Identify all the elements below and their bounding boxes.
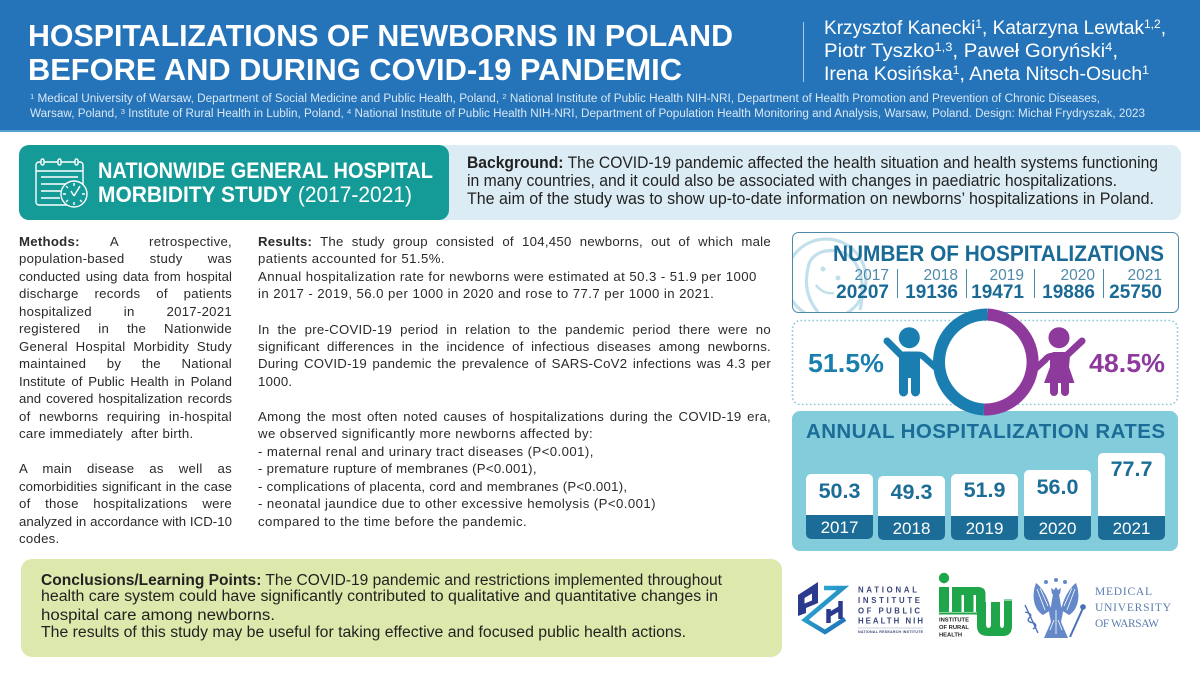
text block: results xyxy=(258,234,771,529)
text block: results: Annual hospitalization rate for newborns were estimated at 50.3 - 51.9 per 1000 xyxy=(258,269,757,284)
donut chart xyxy=(939,314,1033,410)
authors: 1 xyxy=(1142,63,1149,77)
bar 2019: 2019 xyxy=(966,519,1003,538)
years row: 2021 xyxy=(1128,267,1162,284)
text block: results: During COVID-19 pandemic the prevalence of SARS-CoV2 infections was 4.3 per xyxy=(258,356,771,371)
text block: results: significant differences in the incidence of infectious diseases among newborns. xyxy=(258,339,771,354)
bar 2020: 56.0 xyxy=(1037,475,1078,499)
panel: number of hospitalizations: NUMBER OF HOSPITALIZATIONS xyxy=(833,241,1164,266)
years row: 2017 xyxy=(855,267,889,284)
panel: study name xyxy=(19,145,449,220)
affiliations xyxy=(30,92,1145,120)
logo: institute of rural health xyxy=(939,573,1012,638)
text block: methods: analyzed in accordance with ICD-10 xyxy=(19,514,232,529)
text block: results: Results: The study group consisted of 104,450 newborns, out of which male xyxy=(258,234,771,249)
affiliations: National Institute of Public Health NIH-NRI, Department of Population Health Monitoring and Analysis, Warsaw, Poland. Design: Michał Frydryszak, 2023 xyxy=(351,108,1145,120)
text block: methods: conducted using data from hospital xyxy=(19,269,232,284)
panel: annual hospitalization rates xyxy=(792,411,1178,551)
logo: national institute of public health: NATIONAL xyxy=(858,586,917,594)
text block: methods: discharge records of patients xyxy=(19,286,232,301)
text block: methods: A main disease as well as xyxy=(19,461,232,476)
logo: national institute of public health: NATIONAL RESEARCH INSTITUTE xyxy=(858,630,924,634)
authors xyxy=(824,17,1166,85)
panel: background xyxy=(430,145,1181,220)
bar 2020: 2020 xyxy=(1039,519,1076,538)
text block: methods: codes. xyxy=(19,531,59,546)
authors: , Katarzyna Lewtak xyxy=(982,18,1144,39)
panel: background: Background: The COVID-19 pandemic affected the health situation and health systems functioning xyxy=(467,154,1158,172)
affiliations: Institute of Rural Health in Lublin, Poland, xyxy=(125,108,347,120)
authors: 1 xyxy=(975,17,982,31)
text block: results: patients accounted for 51.5%. xyxy=(258,251,445,266)
bar 2018: 2018 xyxy=(893,519,930,538)
text block: methods: population-based study was xyxy=(19,251,232,266)
panel: annual hospitalization rates: ANNUAL HOSPITALIZATION RATES xyxy=(806,420,1165,443)
years row: 2018 xyxy=(924,267,958,284)
text block: results: - premature rupture of membranes (P<0.001), xyxy=(258,461,537,476)
years row xyxy=(855,267,1162,284)
text block: results: we observed significantly more newborns affected by: xyxy=(258,426,593,441)
text block: methods xyxy=(19,234,232,546)
text block: methods: of those hospitalizations were xyxy=(19,496,232,511)
affiliations: 4 xyxy=(347,107,351,116)
text block: methods: of newborns requiring in-hospital xyxy=(19,409,232,424)
authors: Krzysztof Kanecki xyxy=(824,18,975,39)
authors: 1 xyxy=(953,63,960,77)
logo: institute of rural health: INSTITUTE xyxy=(939,618,969,624)
values row xyxy=(836,282,1162,303)
text block: methods: registered in the Nationwide xyxy=(19,321,232,336)
text block: results: - complications of placenta, cord and membranes (P<0.001), xyxy=(258,479,627,494)
panel: conclusions: The results of this study may be useful for taking effective and focused public health actions. xyxy=(41,624,686,641)
text block: methods: care immediately after birth. xyxy=(19,426,193,441)
bar 2017: 50.3 xyxy=(819,479,860,503)
bar 2021: 77.7 xyxy=(1111,457,1152,481)
values row: 19136 xyxy=(905,282,958,303)
panel: study name: NATIONWIDE GENERAL HOSPITAL xyxy=(98,158,433,183)
panel: conclusions: Conclusions/Learning Points: The COVID-19 pandemic and restrictions implemented throughout xyxy=(41,572,723,589)
authors: , xyxy=(1112,41,1118,62)
text block: methods: maintained by the National xyxy=(19,356,232,371)
text block: results: in 2017 - 2019, 56.0 per 1000 in 2020 and rose to 77.7 per 1000 in 2021. xyxy=(258,286,714,301)
bar 2019 xyxy=(951,474,1018,540)
bar 2019: 51.9 xyxy=(964,478,1005,502)
authors: 1,3 xyxy=(935,40,953,54)
icon: calendar and clock xyxy=(36,159,87,207)
text block: methods: Methods: A retrospective, xyxy=(19,234,232,249)
bar 2018: 49.3 xyxy=(891,480,932,504)
panel: conclusions xyxy=(21,559,782,657)
authors: , Aneta Nitsch-Osuch xyxy=(959,64,1142,85)
affiliations: 3 xyxy=(121,107,125,116)
text block: methods: and covered hospitalization records xyxy=(19,391,232,406)
bar 2017 xyxy=(806,474,873,539)
authors: 1,2 xyxy=(1144,17,1161,31)
bar 2017: 2017 xyxy=(821,518,858,537)
text block: results: 1000. xyxy=(258,374,292,389)
affiliations: Warsaw, Poland, xyxy=(30,108,116,120)
text block: methods: Institute of Public Health in Poland xyxy=(19,374,232,389)
affiliations: National Institute of Public Health NIH-NRI, Department of Health Promotion and Prevention of Chronic Diseases, xyxy=(507,93,1100,105)
panel: conclusions: hospital care among newborns. xyxy=(41,607,275,624)
logo: national institute of public health: HEALTH NIH xyxy=(858,616,923,626)
percent male: 51.5% xyxy=(808,348,884,378)
text block: results: compared to the time before the pandemic. xyxy=(258,514,527,529)
icon: girl xyxy=(1034,327,1082,392)
title xyxy=(28,19,733,87)
title: BEFORE AND DURING COVID-19 PANDEMIC xyxy=(28,53,682,87)
logo: national institute of public health xyxy=(798,582,924,634)
panel: header xyxy=(0,0,1200,132)
title: HOSPITALIZATIONS OF NEWBORNS IN POLAND xyxy=(28,19,733,53)
authors: , Paweł Goryński xyxy=(952,41,1105,62)
logo: institute of rural health: HEALTH xyxy=(939,632,962,638)
logo: institute of rural health: OF RURAL xyxy=(939,625,969,631)
icon: boy xyxy=(887,327,935,392)
panel: number of hospitalizations xyxy=(786,232,1178,319)
affiliations: 2 xyxy=(502,92,507,101)
authors: Piotr Tyszko xyxy=(824,41,927,62)
logo: medical university of warsaw: OF WARSAW xyxy=(1095,618,1159,630)
values row: 25750 xyxy=(1109,282,1162,303)
panel: background: The aim of the study was to show up-to-date information on newborns’ hospitalizations in Poland. xyxy=(467,190,1154,208)
icon: baby face watermark xyxy=(793,237,868,312)
logo: national institute of public health: INSTITUTE xyxy=(858,596,920,605)
values row: 19471 xyxy=(971,282,1024,303)
affiliations: Medical University of Warsaw, Department of Social Medicine and Public Health, Poland, xyxy=(34,93,502,105)
values row: 20207 xyxy=(836,282,889,303)
text block: results: - maternal renal and urinary tract diseases (P<0.001), xyxy=(258,444,594,459)
bar 2020 xyxy=(1024,470,1091,540)
authors: , xyxy=(1161,18,1166,39)
text block: methods: comorbidities significant in the case xyxy=(19,479,232,494)
logo: medical university of warsaw xyxy=(1025,578,1172,638)
authors: 4 xyxy=(1105,40,1113,54)
years row: 2019 xyxy=(990,267,1024,284)
bar 2018 xyxy=(878,476,945,540)
text block: results: Among the most often noted causes of hospitalizations during the COVID-19 era, xyxy=(258,409,771,424)
panel: gender split xyxy=(792,314,1178,551)
percent female: 48.5% xyxy=(1089,348,1165,378)
logo: medical university of warsaw: MEDICAL xyxy=(1095,586,1152,598)
authors: Irena Kosińska xyxy=(824,64,950,85)
panel: conclusions: health care system could have significantly contributed to qualitative and quantitative changes in xyxy=(41,588,718,605)
affiliations: 1 xyxy=(30,92,34,101)
years row: 2020 xyxy=(1061,267,1095,284)
text block: methods: General Hospital Morbidity Study xyxy=(19,339,232,354)
text block: methods: hospitalized in 2017-2021 xyxy=(19,304,232,319)
values row: 19886 xyxy=(1042,282,1095,303)
panel: study name: MORBIDITY STUDY (2017-2021) xyxy=(98,182,412,207)
logo: national institute of public health: OF PUBLIC xyxy=(858,606,920,616)
panel: background: in many countries, and it could also be associated with changes in paediatric hospitalizations. xyxy=(467,172,1117,190)
text block: results: - neonatal jaundice due to other excessive hemolysis (P<0.001) xyxy=(258,496,656,511)
bar 2021 xyxy=(1098,453,1165,540)
text block: results: In the pre-COVID-19 period in relation to the pandemic period there were no xyxy=(258,322,771,337)
logo: medical university of warsaw: UNIVERSITY xyxy=(1095,602,1172,614)
bar 2021: 2021 xyxy=(1113,519,1150,538)
